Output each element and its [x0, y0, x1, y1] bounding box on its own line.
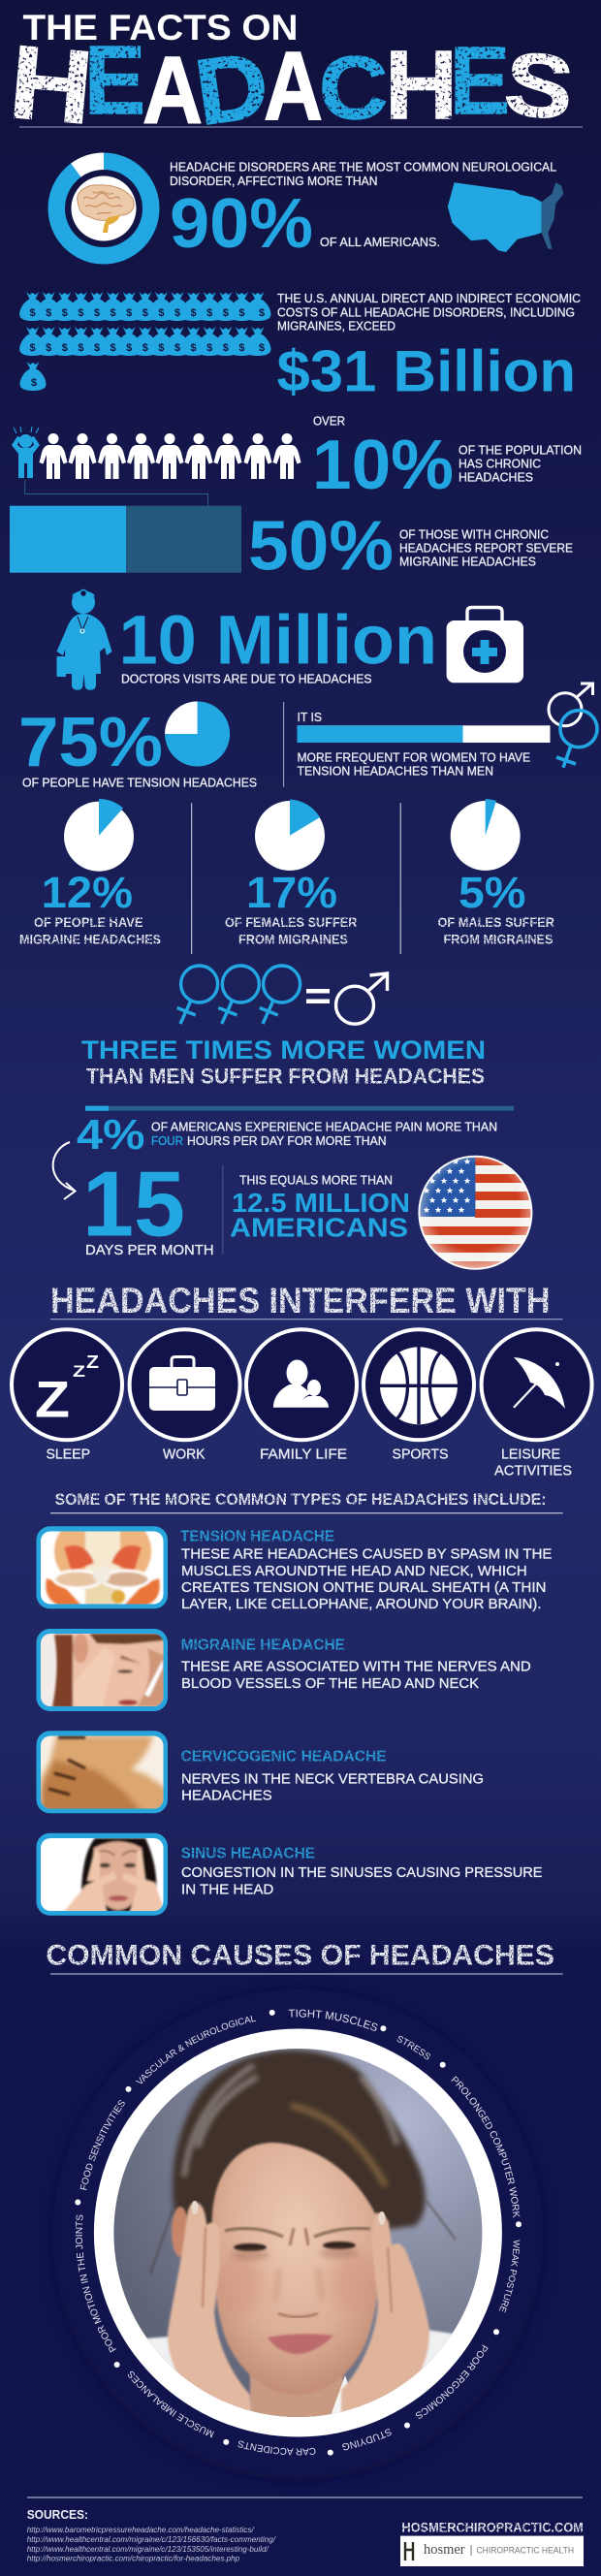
title: headaches: H [5, 23, 97, 146]
text: of people migraine [19, 914, 161, 946]
face [212, 2143, 379, 2395]
item: migraine headache [37, 1629, 531, 1711]
item: sleep [12, 1329, 122, 1462]
item: sleep: Z [86, 1352, 99, 1372]
icons: money bags: $ [111, 307, 116, 319]
text: cervicogenic body [181, 1770, 484, 1804]
brows and eyes [225, 2228, 370, 2237]
title: headaches [5, 23, 578, 146]
pie: 17% [255, 799, 325, 871]
heading: tension: TENSION HEADACHE [180, 1528, 334, 1544]
icons: money bags: $ [46, 342, 51, 354]
stat: 12.5 million americans [230, 1188, 410, 1243]
text: of people migraine: OF PEOPLE HAVE [34, 914, 143, 930]
text: migraine body: BLOOD VESSELS OF THE HEAD AND NECK [181, 1675, 479, 1692]
panel: three times more women [81, 966, 486, 1088]
text: migraine body: THESE ARE ASSOCIATED WITH THE NERVES AND [181, 1659, 531, 1675]
ring text: causes list [76, 2009, 520, 2455]
text: more frequent: MORE FREQUENT FOR WOMEN TO HAVE [297, 750, 530, 765]
text: tension body: THESE ARE HEADACHES CAUSED BY SPASM IN THE [181, 1545, 552, 1562]
donut chart with brain [56, 153, 151, 256]
item: leisure activities: ACTIVITIES [494, 1463, 572, 1479]
heading: migraine: MIGRAINE HEADACHE [181, 1638, 345, 1654]
item: sports: SPORTS [392, 1446, 448, 1462]
logo: hosmer chiropractic health [400, 2536, 584, 2566]
icon: US map [448, 182, 563, 252]
panel: severe migraine 50% [10, 506, 573, 586]
text: of the population [459, 443, 582, 485]
photo: head muscles anatomy [37, 1526, 168, 1609]
text: more frequent [297, 750, 530, 778]
ring text: causes list: POOR ERGONOMICS [415, 2344, 489, 2419]
text: doctors visits: DOCTORS VISITS ARE DUE TO HEADACHES [121, 671, 372, 685]
bar: half split [10, 506, 241, 573]
ring text: causes list: FOOD SENSITIVITIES [79, 2100, 125, 2190]
text: of males: FROM MIGRAINES [444, 931, 553, 946]
text: sinus body [181, 1864, 543, 1897]
text: website: HOSMERCHIROPRACTIC.COM [401, 2521, 584, 2535]
text: of males [438, 914, 554, 946]
ring text: causes list: POOR MOTION IN THE JOINTS [76, 2214, 116, 2352]
text: of the population: HEADACHES [459, 470, 533, 485]
title: headaches: S [500, 34, 578, 139]
heading: causes: COMMON CAUSES OF HEADACHES [46, 1940, 554, 1972]
text: source links: http://hosmerchiropractic.com/chiropractic/for-headaches.php [27, 2554, 239, 2563]
arrow: curved [53, 1142, 76, 1199]
text: source links: http://www.healthcentral.com/migraine/c/123/153505/interesting-build/ [27, 2544, 269, 2554]
bar: frequency [297, 725, 551, 743]
text: of those: OF THOSE WITH CHRONIC [399, 526, 549, 541]
title: the facts on: THE FACTS ON [23, 8, 299, 48]
hand left [168, 2202, 252, 2419]
title: headaches: H [385, 31, 458, 140]
icons: money bags: $ [191, 342, 197, 354]
ring text: causes list: VASCULAR & NEUROLOGICAL [136, 2016, 256, 2084]
icon: american flag circle [417, 1154, 535, 1272]
text: tension body: LAYER, LIKE CELLOPHANE, AROUND YOUR BRAIN). [181, 1596, 541, 1612]
icons: money bags: $ [94, 342, 100, 354]
logo: hosmer chiropractic health: hosmer [424, 2542, 465, 2558]
item: sinus headache [37, 1833, 543, 1916]
title: headaches: E [450, 27, 510, 134]
panel: common causes [46, 1940, 563, 2476]
item: cervicogenic headache [37, 1731, 484, 1813]
stat: 10%: 10% [312, 427, 454, 504]
text: cervicogenic body: HEADACHES [181, 1788, 272, 1804]
text: experience pain: FOUR [151, 1133, 183, 1148]
item: sports [364, 1329, 474, 1462]
text: of females: OF FEMALES SUFFER [225, 914, 357, 930]
icons: money bags: $ [142, 307, 148, 319]
icons: money bags: $ [142, 342, 148, 354]
stat: 50%: 50% [248, 508, 394, 586]
text: experience pain [151, 1120, 497, 1148]
text: experience pain: OF AMERICANS EXPERIENCE HEADACHE PAIN MORE THAN [151, 1120, 497, 1134]
panel: 4% chronic daily [53, 1106, 535, 1272]
icons: money bags: $ [94, 307, 100, 319]
text: it is: IT IS [297, 710, 322, 724]
title: headaches: A [264, 32, 323, 141]
ring dots [75, 2010, 522, 2456]
icons: money bags: $ [259, 307, 265, 319]
icons: money bags: $ [78, 307, 83, 319]
stat: 90%: 90% [170, 185, 313, 263]
shirt [146, 2329, 453, 2410]
logo: hosmer chiropractic health: CHIROPRACTIC HEALTH [477, 2546, 574, 2556]
heading: cervicogenic: CERVICOGENIC HEADACHE [181, 1749, 387, 1765]
ring text: causes list: MUSCLE IMBALANCES [128, 2371, 214, 2437]
icons: money bags: $ [158, 307, 164, 319]
panel: types of headaches [37, 1490, 563, 1916]
item: leisure activities: LEISURE [501, 1446, 560, 1462]
text: disorders: HEADACHE DISORDERS ARE THE MOST COMMON NEUROLOGICAL [170, 160, 556, 175]
text: sinus body: IN THE HEAD [181, 1881, 273, 1897]
text: source links: http://www.barometricpressureheadache.com/headache-statistics/ [27, 2525, 255, 2534]
item: sleep: Z [73, 1362, 85, 1381]
icons: money bags: $ [62, 307, 68, 319]
stat: 75%: 75% [18, 704, 163, 781]
text: disorders: DISORDER, AFFECTING MORE THAN [170, 174, 378, 188]
photo: woman pressing sinuses [37, 1833, 168, 1916]
stat: 10 million: 10 Million [119, 602, 437, 679]
panel: economic costs [19, 291, 581, 403]
panel: chronic headaches 10% [12, 413, 582, 504]
icons: money bags: $ [238, 342, 244, 354]
text: cervicogenic body: NERVES IN THE NECK VERTEBRA CAUSING [181, 1770, 484, 1787]
icons: money bags: $ [62, 342, 68, 354]
item: sleep: Z [35, 1372, 70, 1429]
hand right [341, 2212, 429, 2419]
icons: money bags: $ [158, 342, 164, 354]
icons: money bags: $ [191, 307, 197, 319]
panel: headaches interfere with [12, 1281, 592, 1479]
heading: than men suffer: THAN MEN SUFFER FROM HEADACHES [86, 1064, 485, 1088]
text: of people migraine: MIGRAINE HEADACHES [19, 931, 161, 946]
text: of the population: HAS CHRONIC [459, 457, 541, 471]
pie chart: 75% [165, 702, 230, 766]
panel: migraine pies [19, 799, 554, 954]
text: disorders [170, 160, 556, 188]
pie: 12% [64, 799, 134, 872]
ear [172, 2207, 189, 2257]
icon: first aid kit [447, 607, 523, 683]
neck [248, 2373, 345, 2417]
progress bar: 4% [85, 1106, 514, 1111]
ring text: causes list: STUDYING [342, 2429, 392, 2451]
icon: brain [78, 185, 134, 233]
text: days per month: DAYS PER MONTH [85, 1243, 214, 1258]
icons: money bags: $ [238, 307, 244, 319]
text: more frequent: TENSION HEADACHES THAN MEN [297, 763, 493, 778]
icons: money bags: $ [46, 307, 51, 319]
lips [268, 2334, 333, 2354]
text: economic costs: MIGRAINES, EXCEED [277, 319, 395, 334]
panel: tension headaches 75% [18, 702, 257, 790]
text: of those [399, 526, 573, 568]
text: migraine body [181, 1659, 531, 1692]
text: economic costs: THE U.S. ANNUAL DIRECT AND INDIRECT ECONOMIC [277, 291, 581, 305]
icons: money bags: $ [30, 307, 36, 319]
ring text: causes list: WEAK POSTURE [499, 2240, 520, 2313]
title: headaches: A [142, 37, 203, 143]
icons: money bags: $ [126, 342, 132, 354]
icon: doctor [56, 589, 112, 690]
icon: row of people [39, 433, 300, 479]
icons: money bags: $ [223, 342, 229, 354]
stat: 12%: 12% [42, 868, 133, 917]
ring text: causes list: TIGHT MUSCLES [289, 2009, 378, 2031]
stat: 4%: 4% [77, 1111, 145, 1159]
photo: woman holding temple [37, 1629, 168, 1711]
ring text: causes list: STRESS [396, 2036, 430, 2059]
text: tension body: MUSCLES AROUNDTHE HEAD AND NECK, WHICH [181, 1563, 527, 1579]
stat: 15: 15 [82, 1152, 185, 1256]
text: of all americans: OF ALL AMERICANS. [320, 235, 440, 249]
icons: money bags: $ [174, 342, 180, 354]
item: family life [246, 1329, 357, 1462]
cheek shading [215, 2252, 262, 2314]
text: of those: HEADACHES REPORT SEVERE [399, 540, 573, 555]
heading: three times more women: THREE TIMES MORE WOMEN [81, 1035, 486, 1065]
panel: neurological disorder 90% [56, 153, 563, 263]
ring text: causes list: CAR ACCIDENTS [238, 2441, 316, 2455]
heading: sources: SOURCES: [27, 2508, 88, 2522]
hair [173, 2050, 426, 2230]
icons: money bags: $ [78, 342, 83, 354]
heading: interfere: HEADACHES INTERFERE WITH [50, 1281, 551, 1320]
text: tension body: CREATES TENSION ONTHE DURAL SHEATH (A THIN [181, 1579, 547, 1596]
panel: doctor visits [56, 589, 523, 690]
text: of females: FROM MIGRAINES [238, 931, 348, 946]
stat: 12.5 million americans: AMERICANS [230, 1213, 408, 1243]
icons: money bags: $ [206, 342, 212, 354]
stat: $31 billion: $31 Billion [277, 338, 576, 403]
title: headaches: D [189, 32, 274, 145]
icon: three females equals male [177, 966, 388, 1024]
text: of males: OF MALES SUFFER [438, 914, 554, 930]
pie: 5% [451, 799, 521, 871]
item: leisure activities [482, 1329, 592, 1479]
text: this equals: THIS EQUALS MORE THAN [239, 1173, 393, 1188]
icons: money bags: $ [206, 307, 212, 319]
heading: types: SOME OF THE MORE COMMON TYPES OF HEADACHES INCLUDE: [54, 1490, 547, 1509]
icon: gender symbols [549, 684, 597, 768]
text: experience pain: HOURS PER DAY FOR MORE THAN [187, 1133, 387, 1148]
text: source links: http://www.healthcentral.com/migraine/c/123/156630/facts-commenting/ [27, 2534, 277, 2544]
heading: sinus: SINUS HEADACHE [181, 1846, 315, 1862]
panel: footer [27, 2497, 584, 2566]
text: tension body [181, 1545, 552, 1612]
text: over: OVER [313, 413, 345, 428]
text: economic costs [277, 291, 581, 334]
text: of those: MIGRAINE HEADACHES [399, 554, 536, 568]
text: of females [225, 914, 357, 946]
panel: women vs men tension [297, 684, 597, 778]
text: source links [27, 2525, 277, 2563]
icons: money bags: $ [31, 377, 37, 389]
stat: 12.5 million americans: 12.5 MILLION [232, 1188, 410, 1218]
ring text: causes list: PROLONGED COMPUTER WORK [451, 2076, 520, 2218]
icons: money bags [19, 292, 270, 391]
icons: money bags: $ [223, 307, 229, 319]
stat: 5%: 5% [459, 868, 525, 917]
icons: money bags: $ [30, 342, 36, 354]
icons: money bags: $ [111, 342, 116, 354]
item: work: WORK [163, 1446, 206, 1462]
causes wheel [56, 1993, 539, 2476]
icons: money bags: $ [174, 307, 180, 319]
title: headaches: E [84, 26, 145, 135]
icons: money bags: $ [259, 342, 265, 354]
text: of people tension: OF PEOPLE HAVE TENSION HEADACHES [22, 776, 257, 790]
item: work [130, 1329, 240, 1462]
icons: money bags: $ [126, 307, 132, 319]
text: sinus body: CONGESTION IN THE SINUSES CAUSING PRESSURE [181, 1864, 543, 1881]
stat: 17%: 17% [246, 868, 337, 917]
photo: woman with headache [111, 2046, 485, 2419]
icon: man in pain [12, 427, 40, 478]
title: headaches: C [319, 39, 388, 138]
photo: hand on neck [37, 1731, 168, 1813]
title block [5, 8, 578, 146]
item: sleep: SLEEP [47, 1446, 90, 1462]
item: tension headache [37, 1526, 552, 1611]
text: economic costs: COSTS OF ALL HEADACHE DISORDERS, INCLUDING [277, 305, 575, 320]
item: family life: FAMILY LIFE [260, 1446, 347, 1462]
text: of the population: OF THE POPULATION [459, 443, 582, 458]
